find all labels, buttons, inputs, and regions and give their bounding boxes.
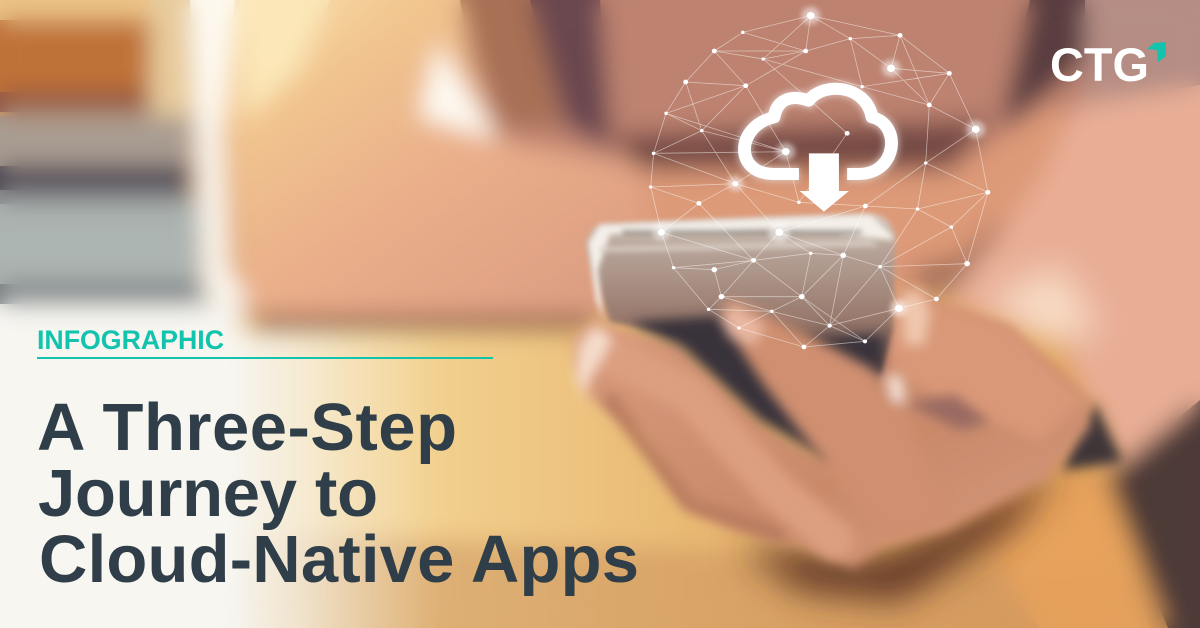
title: Journey to [38, 456, 378, 531]
phone shadow area [629, 316, 884, 460]
title: A Three-Step [37, 390, 457, 465]
dark cuff [1062, 403, 1123, 470]
phone top edge highlight [588, 215, 893, 318]
icon: cloud with download arrow [744, 89, 891, 212]
icon: logo teal arrow [1147, 42, 1166, 62]
title [37, 390, 639, 597]
phone body [587, 214, 895, 375]
logo: CTG: CTG [1050, 38, 1149, 91]
eyebrow rule [37, 357, 493, 359]
shadow under hand [740, 470, 1060, 600]
hand and phone [574, 214, 1123, 600]
mesh lines [651, 16, 988, 347]
cloud halo [744, 89, 891, 174]
node glow [653, 7, 985, 316]
nodes [649, 12, 990, 349]
fingers [575, 290, 990, 543]
thumb [885, 288, 1085, 440]
title: Cloud-Native Apps [39, 522, 639, 597]
eyebrow label: INFOGRAPHIC [37, 325, 224, 355]
network sphere [649, 7, 990, 349]
sleeve highlight [985, 265, 1100, 345]
hand silhouette [574, 288, 1090, 568]
